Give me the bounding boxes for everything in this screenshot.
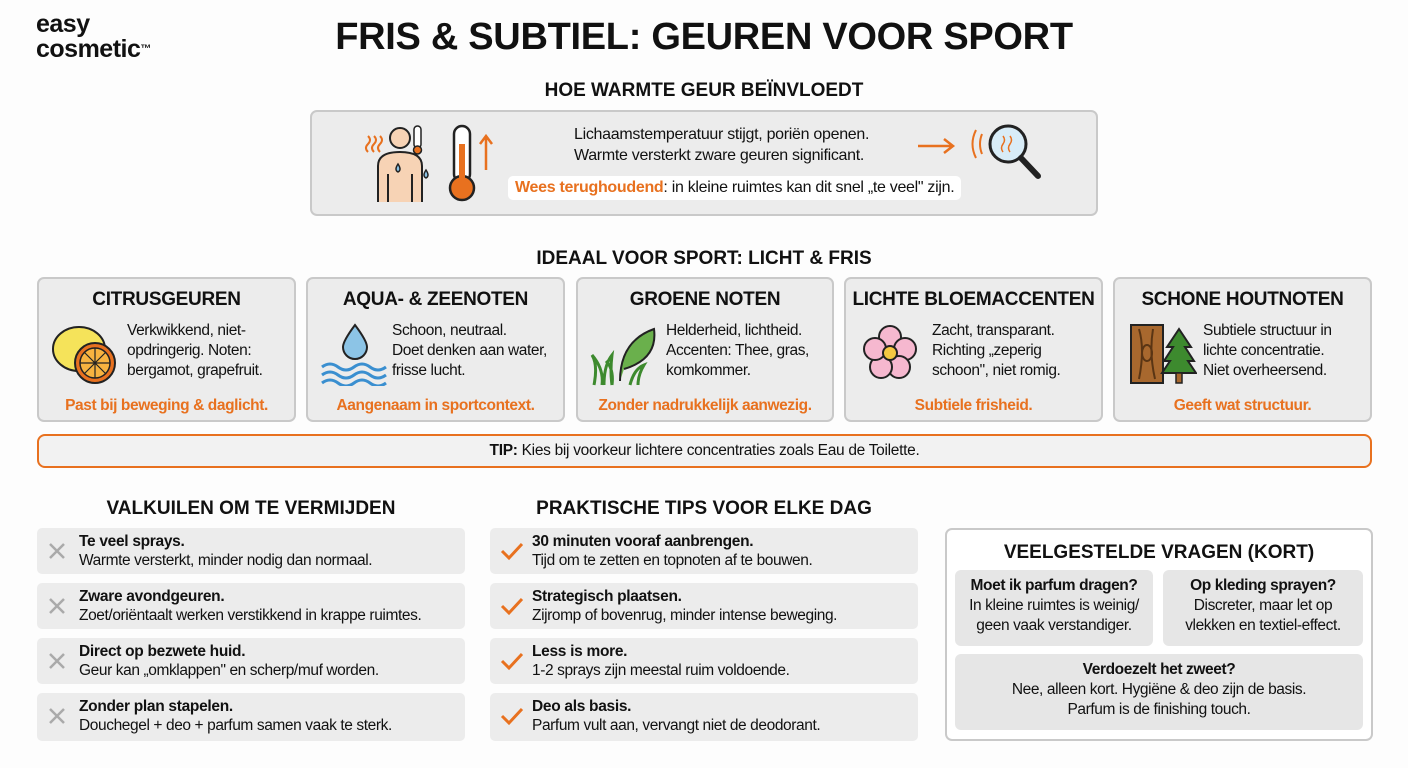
item 2 [37, 583, 465, 629]
card: citrus: Verkwikkend, niet- [127, 322, 246, 339]
card: bloem: Richting „zeperig [932, 342, 1042, 359]
text: warmte: Lichaamstemperatuur stijgt, poriën openen. [574, 126, 869, 143]
icon: leaf grass [590, 328, 656, 386]
item 2: Zware avondgeuren. [79, 588, 224, 605]
icon: wood tree [1130, 324, 1197, 384]
card: aqua: frisse lucht. [392, 362, 465, 379]
icon: flower [863, 325, 917, 379]
heading: ideaal: IDEAAL VOOR SPORT: LICHT & FRIS [536, 248, 872, 269]
card: citrus: bergamot, grapefruit. [127, 362, 262, 379]
faq 1 [955, 570, 1153, 646]
card: aqua: Schoon, neutraal. [392, 322, 507, 339]
text: warmte: Warmte versterkt zware geuren significant. [574, 147, 864, 164]
card: groen: Helderheid, lichtheid. [666, 322, 802, 339]
card: aqua: Doet denken aan water, [392, 342, 547, 359]
item 4: Parfum vult aan, vervangt niet de deodorant. [532, 717, 820, 734]
list: tips [490, 528, 918, 741]
item 1 [37, 528, 465, 574]
card: groen: Zonder nadrukkelijk aanwezig. [598, 397, 812, 414]
card: aqua: AQUA- & ZEENOTEN [343, 289, 528, 310]
card: bloem: schoon", niet romig. [932, 362, 1060, 379]
text: warmte [574, 126, 869, 164]
item 4 [490, 693, 918, 741]
panel: FAQ [945, 528, 1373, 741]
card: hout: lichte concentratie. [1203, 342, 1324, 359]
faq 3 [955, 654, 1363, 730]
card: bloem [844, 277, 1103, 422]
icon: water [321, 324, 387, 386]
tip bar: TIP: Kies bij voorkeur lichtere concentraties zoals Eau de Toilette. [490, 442, 919, 459]
logo: easy [36, 10, 90, 38]
card: hout [1113, 277, 1372, 422]
faq 2: vlekken en textiel-effect. [1185, 617, 1341, 634]
card: groen [576, 277, 834, 422]
callout: terughoudend [508, 176, 961, 200]
item 2 [490, 583, 918, 629]
icon: person with heat [364, 125, 429, 202]
item 1: 30 minuten vooraf aanbrengen. [532, 533, 753, 550]
card: hout: SCHONE HOUTNOTEN [1141, 289, 1344, 310]
icon: thermometer [448, 124, 493, 202]
icon: citrus [52, 326, 116, 384]
card: bloem: Subtiele frisheid. [915, 397, 1032, 414]
title: FRIS & SUBTIEL: GEUREN VOOR SPORT [335, 16, 1073, 58]
item 4: Deo als basis. [532, 698, 631, 715]
card: aqua: Aangenaam in sportcontext. [336, 397, 535, 414]
faq 3: Nee, alleen kort. Hygiëne & deo zijn de basis. [1012, 681, 1306, 698]
item 1: Warmte versterkt, minder nodig dan normaal. [79, 552, 372, 569]
card: groen: komkommer. [666, 362, 751, 379]
card: hout: Geeft wat structuur. [1174, 397, 1311, 414]
logo: cosmetic™ [36, 35, 151, 63]
faq 1: geen vaak verstandiger. [976, 617, 1132, 634]
item 2: Zoet/oriëntaalt werken verstikkend in krappe ruimtes. [79, 607, 421, 624]
icon: magnifier [972, 124, 1041, 179]
card: bloem: Zacht, transparant. [932, 322, 1054, 339]
item 3: Direct op bezwete huid. [79, 643, 245, 660]
faq 2: Op kleding sprayen? [1190, 577, 1336, 594]
card: groen: GROENE NOTEN [630, 289, 780, 310]
item 3: 1-2 sprays zijn meestal ruim voldoende. [532, 662, 790, 679]
heading: warmte: HOE WARMTE GEUR BEÏNVLOEDT [545, 80, 863, 101]
arrow [918, 138, 955, 154]
item 1: Tijd om te zetten en topnoten af te bouwen. [532, 552, 812, 569]
item 3 [490, 638, 918, 684]
FAQ title: VEELGESTELDE VRAGEN (KORT) [1004, 542, 1314, 563]
item 3 [37, 638, 465, 684]
faq 2: Discreter, maar let op [1194, 597, 1332, 614]
faq 3: Parfum is de finishing touch. [1067, 701, 1251, 718]
item 1: Te veel sprays. [79, 533, 185, 550]
faq 3: Verdoezelt het zweet? [1083, 661, 1235, 678]
logo [36, 10, 151, 63]
card: citrus: CITRUSGEUREN [92, 289, 241, 310]
item 2: Strategisch plaatsen. [532, 588, 682, 605]
heading: valkuilen: VALKUILEN OM TE VERMIJDEN [107, 498, 395, 519]
item 1 [490, 528, 918, 574]
panel: warmte [310, 110, 1098, 216]
card: citrus: opdringerig. Noten: [127, 342, 251, 359]
card: citrus [37, 277, 296, 422]
item 3: Less is more. [532, 643, 627, 660]
item 2: Zijromp of bovenrug, minder intense beweging. [532, 607, 837, 624]
card: citrus: Past bij beweging & daglicht. [65, 397, 268, 414]
list: valkuilen [37, 528, 465, 741]
callout: terughoudend: Wees terughoudend: in kleine ruimtes kan dit snel „te veel" zijn. [515, 179, 954, 196]
card: bloem: LICHTE BLOEMACCENTEN [852, 289, 1095, 310]
tip bar [37, 434, 1372, 468]
faq 1: Moet ik parfum dragen? [971, 577, 1137, 594]
card: hout: Subtiele structuur in [1203, 322, 1332, 339]
card: hout: Niet overheersend. [1203, 362, 1327, 379]
heading: tips: PRAKTISCHE TIPS VOOR ELKE DAG [536, 498, 872, 519]
item 4: Zonder plan stapelen. [79, 698, 233, 715]
item 4 [37, 693, 465, 741]
faq 1: In kleine ruimtes is weinig/ [969, 597, 1139, 614]
faq 2 [1163, 570, 1363, 646]
card: groen: Accenten: Thee, gras, [666, 342, 809, 359]
item 4: Douchegel + deo + parfum samen vaak te sterk. [79, 717, 392, 734]
item 3: Geur kan „omklappen" en scherp/muf worden. [79, 662, 379, 679]
card: aqua [306, 277, 565, 422]
